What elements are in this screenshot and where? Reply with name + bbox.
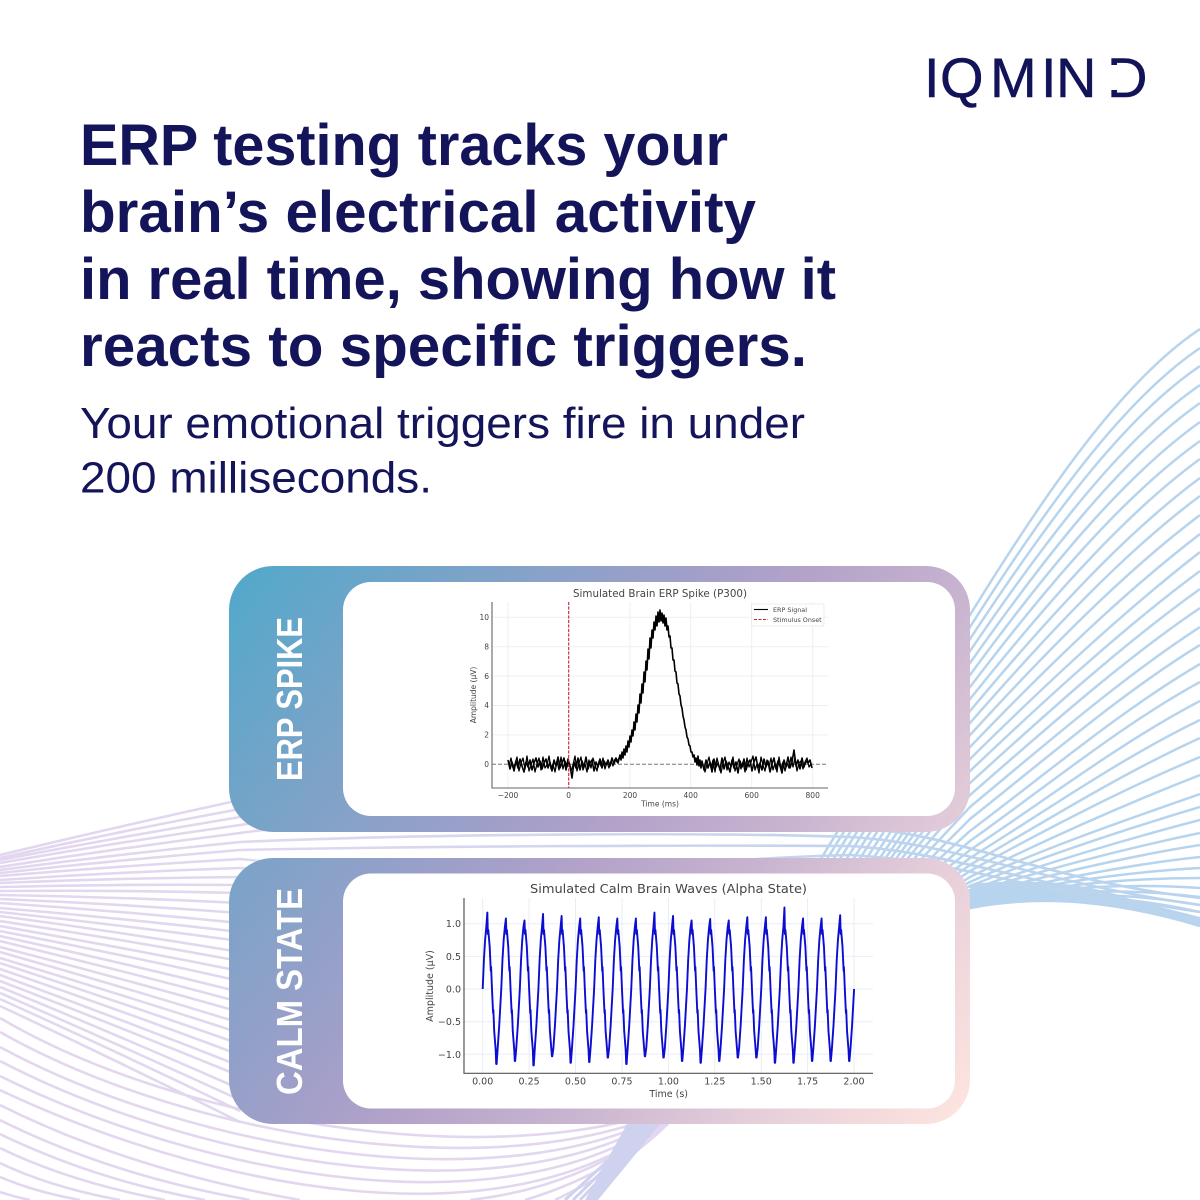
logo: IQMIND (924, 46, 1147, 109)
subtitle: 200 milliseconds. (80, 454, 432, 502)
chart: simulated ERP spike: 600 (745, 791, 759, 800)
legend: Stimulus Onset (773, 616, 822, 624)
background: lower lavender arcs (0, 1018, 690, 1200)
chart: simulated calm brain waves: 2.00 (843, 1076, 865, 1088)
subtitle: Your emotional triggers fire in under (80, 399, 805, 448)
chart: simulated calm brain waves: 0.25 (519, 1076, 540, 1088)
chart: simulated calm brain waves: Time (s) (648, 1089, 688, 1100)
title: ERP testing tracks your (80, 113, 728, 178)
chart: simulated ERP spike: 2 (484, 730, 489, 740)
title (80, 113, 836, 379)
chart: simulated calm brain waves: 1.0 (446, 919, 461, 930)
title: in real time, showing how it (80, 247, 836, 312)
background: steep lilac bundle below lower card (565, 1080, 696, 1200)
chart: simulated ERP spike: 200 (623, 791, 637, 800)
chart: simulated calm brain waves: 0.75 (611, 1076, 633, 1088)
chart: simulated calm brain waves: 1.25 (704, 1076, 725, 1088)
panel: ERP spike (229, 566, 970, 832)
chart: simulated ERP spike (469, 588, 828, 808)
chart: simulated calm brain waves: 1.50 (751, 1076, 772, 1088)
chart: simulated ERP spike: Time (ms) (640, 800, 679, 808)
chart: simulated calm brain waves: 1.75 (797, 1076, 818, 1088)
chart: simulated ERP spike: 4 (484, 701, 489, 710)
legend: ERP Signal (773, 606, 807, 614)
chart: simulated ERP spike: −200 (498, 791, 519, 800)
chart: simulated calm brain waves: Amplitude (µV) (425, 950, 436, 1022)
legend (752, 604, 824, 626)
label: ERP SPIKE: ERP SPIKE (269, 617, 310, 781)
title: brain’s electrical activity (80, 180, 756, 245)
chart: simulated ERP spike: 0 (484, 760, 489, 769)
chart: simulated calm brain waves: 1.00 (658, 1076, 679, 1088)
title: reacts to specific triggers. (80, 314, 807, 379)
chart: simulated calm brain waves: 0.00 (472, 1076, 493, 1088)
chart: simulated ERP spike: Amplitude (µV) (469, 667, 478, 723)
chart: simulated calm brain waves: 0.0 (446, 984, 461, 996)
chart: simulated calm brain waves: Simulated Calm Brain Waves (Alpha State) (530, 881, 807, 896)
background: left lavender line fan (0, 787, 300, 1122)
chart: simulated calm brain waves: −1.0 (438, 1050, 461, 1061)
chart: simulated ERP spike: Simulated Brain ERP Spike (P300) (573, 588, 747, 600)
chart: simulated calm brain waves (425, 881, 873, 1100)
chart: simulated ERP spike: 0 (566, 791, 571, 800)
chart: simulated ERP spike: 6 (484, 672, 489, 681)
chart: simulated calm brain waves: 0.50 (565, 1076, 586, 1088)
chart: simulated ERP spike: 400 (684, 791, 698, 800)
chart: simulated ERP spike: 8 (484, 642, 489, 652)
background: lines crossing the gap between cards (240, 826, 1200, 919)
chart: simulated calm brain waves: 0.5 (446, 952, 461, 963)
subtitle (80, 399, 805, 502)
chart: simulated ERP spike: 800 (806, 791, 820, 800)
chart: simulated ERP spike: 10 (479, 613, 489, 622)
background: right blue line fan (800, 329, 1200, 989)
label: CALM STATE: CALM STATE (269, 888, 310, 1095)
panel: calm state (229, 858, 970, 1124)
chart: simulated calm brain waves: −0.5 (438, 1017, 461, 1028)
